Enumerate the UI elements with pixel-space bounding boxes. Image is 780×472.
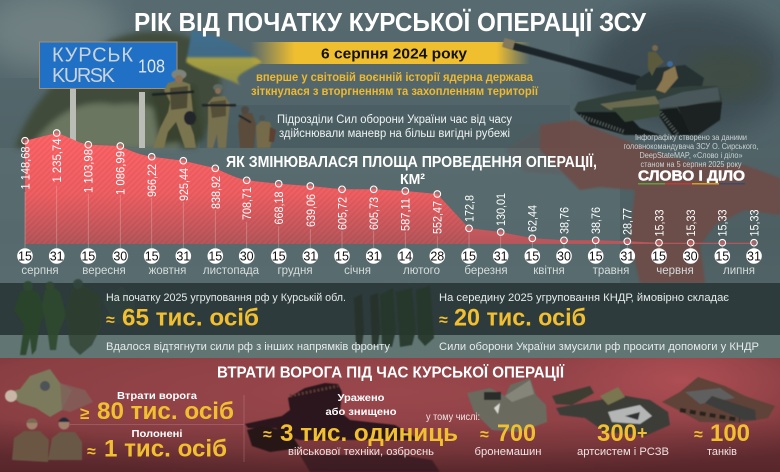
timeline day badges: 30 [113,250,127,264]
label: including: у тому числі: [426,411,480,423]
timeline day badges: 15 [462,250,476,264]
data values: 28,77 [620,208,634,235]
stat: artillery [577,420,669,458]
text: Russian grouping: Вдалося відтягнути сили рф з інших напрямків фронту [106,341,390,353]
stat: prisoners: ≈ [87,444,96,460]
stat: tanks: 100 [710,420,750,447]
stat: armored vehicles: ≈ [480,426,489,444]
data values: 172,8 [462,195,476,222]
text: first invasion statement [251,72,539,98]
road sign Kursk 108: KURSK [52,65,116,87]
photo: road and trees behind sign [15,32,221,148]
lead soldier [153,80,196,148]
timeline day badges: 28 [430,250,444,264]
timeline day badges: 15 [652,250,666,264]
data values: 1 148,68 [18,146,32,190]
timeline day badges: 31 [367,250,381,264]
month labels: березня [464,265,508,277]
stat: tanks: ≈ [694,426,703,444]
timeline day badges: 30 [684,250,698,264]
timeline day badges: 31 [50,250,64,264]
photo: burnt T-tank [662,377,775,423]
month labels: липня [723,265,755,277]
chart heading: КМ² [400,171,425,188]
data values: 62,44 [526,205,540,232]
stat: enemy losses: 80 тис. осіб [97,398,234,425]
map: Kursk region [505,120,780,283]
text: Russian grouping: 65 тис. осіб [122,304,259,332]
chart heading: ЯК ЗМІНЮВАЛАСЯ ПЛОЩА ПРОВЕДЕННЯ ОПЕРАЦІЇ, [226,154,597,171]
stat: armored vehicles: 700 [497,420,536,447]
gun barrel [503,40,644,85]
text: sources: станом на 5 серпня 2025 року [640,160,742,169]
area chart [18,130,762,248]
data values: 15,33 [716,209,730,236]
data values: 605,73 [367,197,381,230]
stat: tanks: танків [707,446,737,458]
text: DPRK grouping: 20 тис. осіб [454,304,586,332]
timeline day badges: 14 [398,250,412,264]
text: manoeuvre: здійснювали маневр на більш вигідні рубежі [279,128,510,140]
timeline day badges: 15 [81,250,95,264]
stat: armored vehicles [474,420,542,458]
stat: equipment: військової техніки, озброєнь [288,446,434,458]
data values: 130,01 [494,193,508,226]
month labels: лютого [403,265,440,277]
photo: artillery [552,386,670,436]
timeline day badges: 15 [589,250,603,264]
stat: equipment: 3 тис. одиниць [280,420,458,447]
crew [648,52,664,76]
stat: artillery: + [637,423,648,443]
date banner: 6 серпня 2024 року [321,46,467,62]
photo: burnt tank [245,383,440,472]
text: DPRK grouping: На середину 2025 угруповання КНДР, ймовірно складає [439,292,729,304]
timeline day badges: 15 [272,250,286,264]
panel: enemy groupings [0,279,780,358]
stat: equipment: ≈ [263,426,272,444]
stat: equipment: або знищено [326,406,396,418]
turret [636,65,704,92]
month labels: грудня [277,265,313,277]
stat: prisoners: 1 тис. осіб [104,436,227,462]
text: sources: DeepStateMAP, «Слово і діло» [640,151,743,160]
title: РІК ВІД ПОЧАТКУ КУРСЬКОЇ ОПЕРАЦІЇ ЗСУ [134,7,647,37]
data values: 925,44 [177,168,191,201]
photo: prisoners [12,418,82,462]
text: sources [624,133,758,169]
area fill [25,133,754,244]
road sign Kursk 108 [40,42,177,148]
photo: fallen soldier [5,369,93,417]
photo: armored vehicle [467,378,547,432]
third soldier [238,113,256,148]
data values: 668,18 [272,191,286,224]
month labels: квітня [533,265,565,277]
text: DPRK grouping [439,292,759,353]
text: Russian grouping: На початку 2025 угруповання рф у Курській обл. [106,292,346,304]
panel: enemy losses [0,358,780,472]
logo: Слово і діло: СЛОВО І ДІЛО [638,168,745,184]
text: DPRK grouping: Сили оборони України змусили рф просити допомоги у КНДР [439,341,759,353]
road sign Kursk 108: КУРСЬК [52,44,133,66]
text: sources: Інфографіку створено за даними [635,133,747,142]
photo: tank [502,38,765,135]
text: sources: головнокомандувача ЗСУ О. Сирського, [624,142,758,151]
road sign Kursk 108: 108 [138,56,165,76]
month labels: січня [344,265,371,277]
text: manoeuvre [277,114,512,140]
stat: artillery: артсистем і РСЗВ [577,446,669,458]
month labels: серпня [21,265,59,277]
text: first invasion statement: вперше у світовій воєнній історії ядерна держава [256,72,534,84]
timeline day badges: 15 [715,250,729,264]
timeline day badges: 31 [494,250,508,264]
stat: equipment: Уражено [338,393,384,404]
timeline day badges: 30 [240,250,254,264]
hull [574,86,722,116]
timeline day badges: 15 [208,250,222,264]
drop lines [25,186,754,248]
timeline day badges: 30 [557,250,571,264]
data values: 966,22 [145,164,159,197]
photo: soldiers [152,70,276,148]
text: Russian grouping [106,292,390,353]
tracks [576,112,660,135]
stat: tanks [694,420,750,458]
stat: prisoners: Полонені [132,429,183,440]
month labels: жовтня [149,265,186,277]
stat: armored vehicles: бронемашин [474,446,542,458]
data values: 605,72 [336,197,350,230]
timeline day badges: 31 [303,250,317,264]
month labels: листопада [203,265,260,277]
losses heading: ВТРАТИ ВОРОГА ПІД ЧАС КУРСЬКОЇ ОПЕРАЦІЇ [217,364,565,382]
photo: DPRK soldiers [354,286,434,347]
stat: enemy losses: Втрати ворога [117,391,197,402]
data values: 38,76 [558,207,572,234]
text: first invasion statement: зіткнулася з вторгненням та захопленням території [251,86,539,98]
data values: 1 086,99 [114,151,128,195]
icon: Ukrainian flag [186,30,262,85]
data point markers [22,130,757,246]
data values: 587,11 [398,198,412,231]
month labels: вересня [82,265,126,277]
timeline day badges: 15 [335,250,349,264]
timeline day badges: 15 [18,250,32,264]
month labels: травня [593,265,629,277]
fourth soldier [256,121,273,148]
stat: equipment [263,393,458,458]
data values: 1 235,74 [50,138,64,182]
stat: artillery: 300 [597,420,637,447]
text: DPRK grouping: ≈ [439,312,448,329]
stat: enemy losses: ≥ [80,404,89,423]
second soldier [207,96,230,148]
timeline day badges: 31 [176,250,190,264]
data values [18,138,762,236]
timeline day badges [17,248,762,264]
data values: 38,76 [589,207,603,234]
data values: 15,33 [748,209,762,236]
data values: 1 103,98 [82,149,96,193]
month labels [21,265,755,277]
text: Russian grouping: ≈ [106,312,115,329]
text: manoeuvre: Підрозділи Сил оборони України час від часу [277,114,512,126]
data values: 15,33 [684,209,698,236]
timeline day badges: 15 [525,250,539,264]
month labels: червня [656,265,694,277]
chart heading [226,154,597,188]
data values: 708,71 [240,187,254,220]
date banner [250,42,530,64]
timeline day badges: 15 [145,250,159,264]
data values: 639,06 [304,194,318,227]
data values: 15,33 [652,209,666,236]
photo: russian soldiers [14,279,135,355]
timeline day badges: 31 [620,250,634,264]
data values: 838,92 [209,176,223,209]
data values: 552,47 [430,201,444,234]
timeline day badges: 31 [747,250,761,264]
